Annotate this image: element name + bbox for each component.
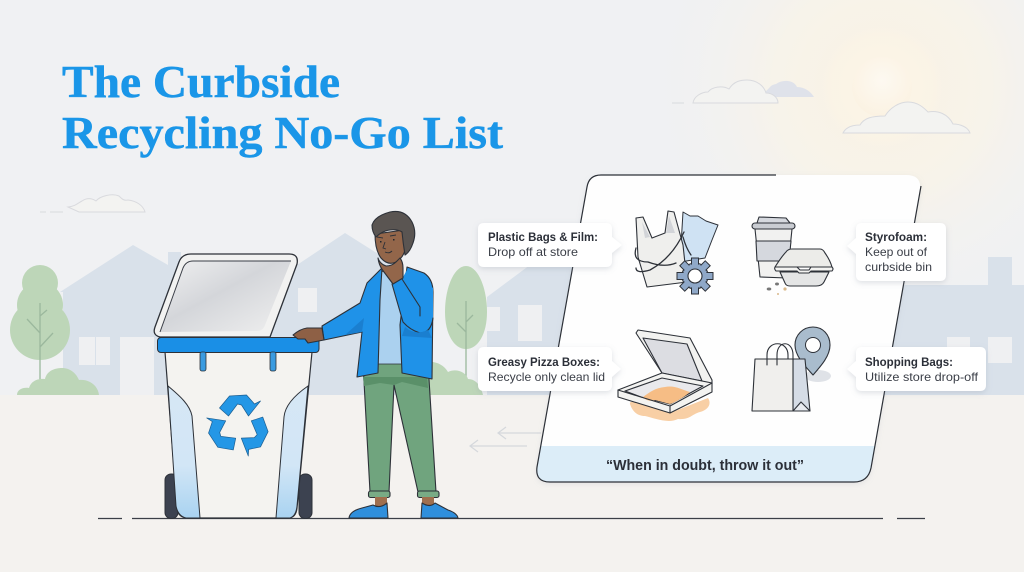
film — [680, 212, 718, 262]
card outline — [537, 175, 921, 482]
callout body: Keep out of — [865, 245, 928, 259]
quote: “When in doubt, throw it out” — [606, 457, 804, 474]
callout heading: Styrofoam: — [865, 230, 927, 244]
person: raised hand — [378, 258, 403, 284]
callout: plastic bags and film — [478, 223, 622, 267]
person: eyes — [380, 239, 394, 242]
title: The Curbside — [62, 56, 340, 107]
bag side — [793, 359, 810, 411]
cloud: grey behind — [765, 81, 814, 97]
cloud: upper left — [40, 195, 145, 212]
title: Recycling No-Go List — [62, 107, 504, 158]
callout body line two: curbside bin — [865, 260, 932, 274]
ground line — [98, 518, 925, 520]
box lid — [636, 330, 712, 384]
cloud: right in front of sun — [843, 102, 970, 133]
icon: shopping bag and map pin — [752, 327, 831, 411]
clamshell — [775, 249, 833, 286]
panel: no-go list card — [530, 175, 921, 482]
bin open lid — [154, 254, 297, 337]
house: far left — [60, 245, 181, 395]
bag fold — [793, 402, 810, 411]
cup — [752, 217, 795, 278]
callout body: Drop off at store — [488, 245, 578, 259]
callout: styrofoam — [847, 223, 946, 281]
callout: shopping bags — [847, 347, 986, 391]
card background — [537, 175, 920, 482]
grease stain — [630, 398, 710, 421]
tree and bush: centre — [428, 266, 487, 395]
person: face details — [377, 235, 396, 253]
person: collar — [402, 266, 408, 282]
house: far right — [850, 257, 1024, 395]
pin shadow — [805, 370, 831, 382]
crumbs — [767, 282, 787, 295]
person: shoes — [349, 503, 458, 518]
icon: styrofoam cup and clamshell — [752, 217, 833, 295]
house: right of tree — [487, 250, 640, 395]
person: jacket right side — [400, 267, 433, 379]
icon: plastic bag and film with gear — [635, 211, 720, 301]
map pin — [795, 327, 830, 375]
person thinking — [293, 211, 458, 518]
callout heading: Plastic Bags & Film: — [488, 230, 598, 244]
person: shirt — [377, 268, 408, 364]
bag tie lines — [635, 232, 691, 272]
house: behind bin and person — [147, 233, 432, 395]
ground — [0, 395, 1024, 572]
gear — [670, 251, 720, 301]
bag — [636, 211, 687, 287]
title — [62, 56, 504, 158]
icon: greasy pizza box — [618, 330, 712, 421]
person: trouser cuffs — [368, 491, 439, 498]
card quote band — [530, 446, 880, 482]
motion arrows — [470, 427, 541, 452]
person: jacket under-arm shade — [345, 318, 364, 335]
grease inside box — [643, 387, 690, 404]
person: trousers — [363, 363, 436, 492]
bin body — [165, 352, 312, 518]
bin wheels — [165, 474, 312, 518]
callout: greasy pizza boxes — [478, 347, 621, 391]
bin blue rim — [158, 338, 319, 371]
cloud: centre — [672, 80, 778, 103]
bag handles — [767, 344, 793, 365]
recycling bin — [154, 254, 319, 518]
icon: recycling symbol — [202, 395, 274, 459]
box base — [618, 373, 712, 413]
person: hand on bin — [293, 328, 324, 343]
callout body: Recycle only clean lid — [488, 370, 605, 384]
callout heading: Shopping Bags: — [865, 355, 953, 369]
person: ankles — [375, 497, 434, 506]
callout heading: Greasy Pizza Boxes: — [488, 355, 600, 369]
person: hair — [372, 211, 415, 255]
tree and bush: left — [10, 265, 99, 395]
bag handle interiors — [642, 216, 675, 238]
person: trouser shadow — [363, 377, 428, 388]
bag front — [752, 359, 793, 411]
person: face — [375, 230, 405, 263]
person: raised sleeve — [390, 268, 433, 338]
person: jacket left side and arm — [322, 268, 382, 377]
callout body: Utilize store drop-off — [865, 370, 979, 384]
